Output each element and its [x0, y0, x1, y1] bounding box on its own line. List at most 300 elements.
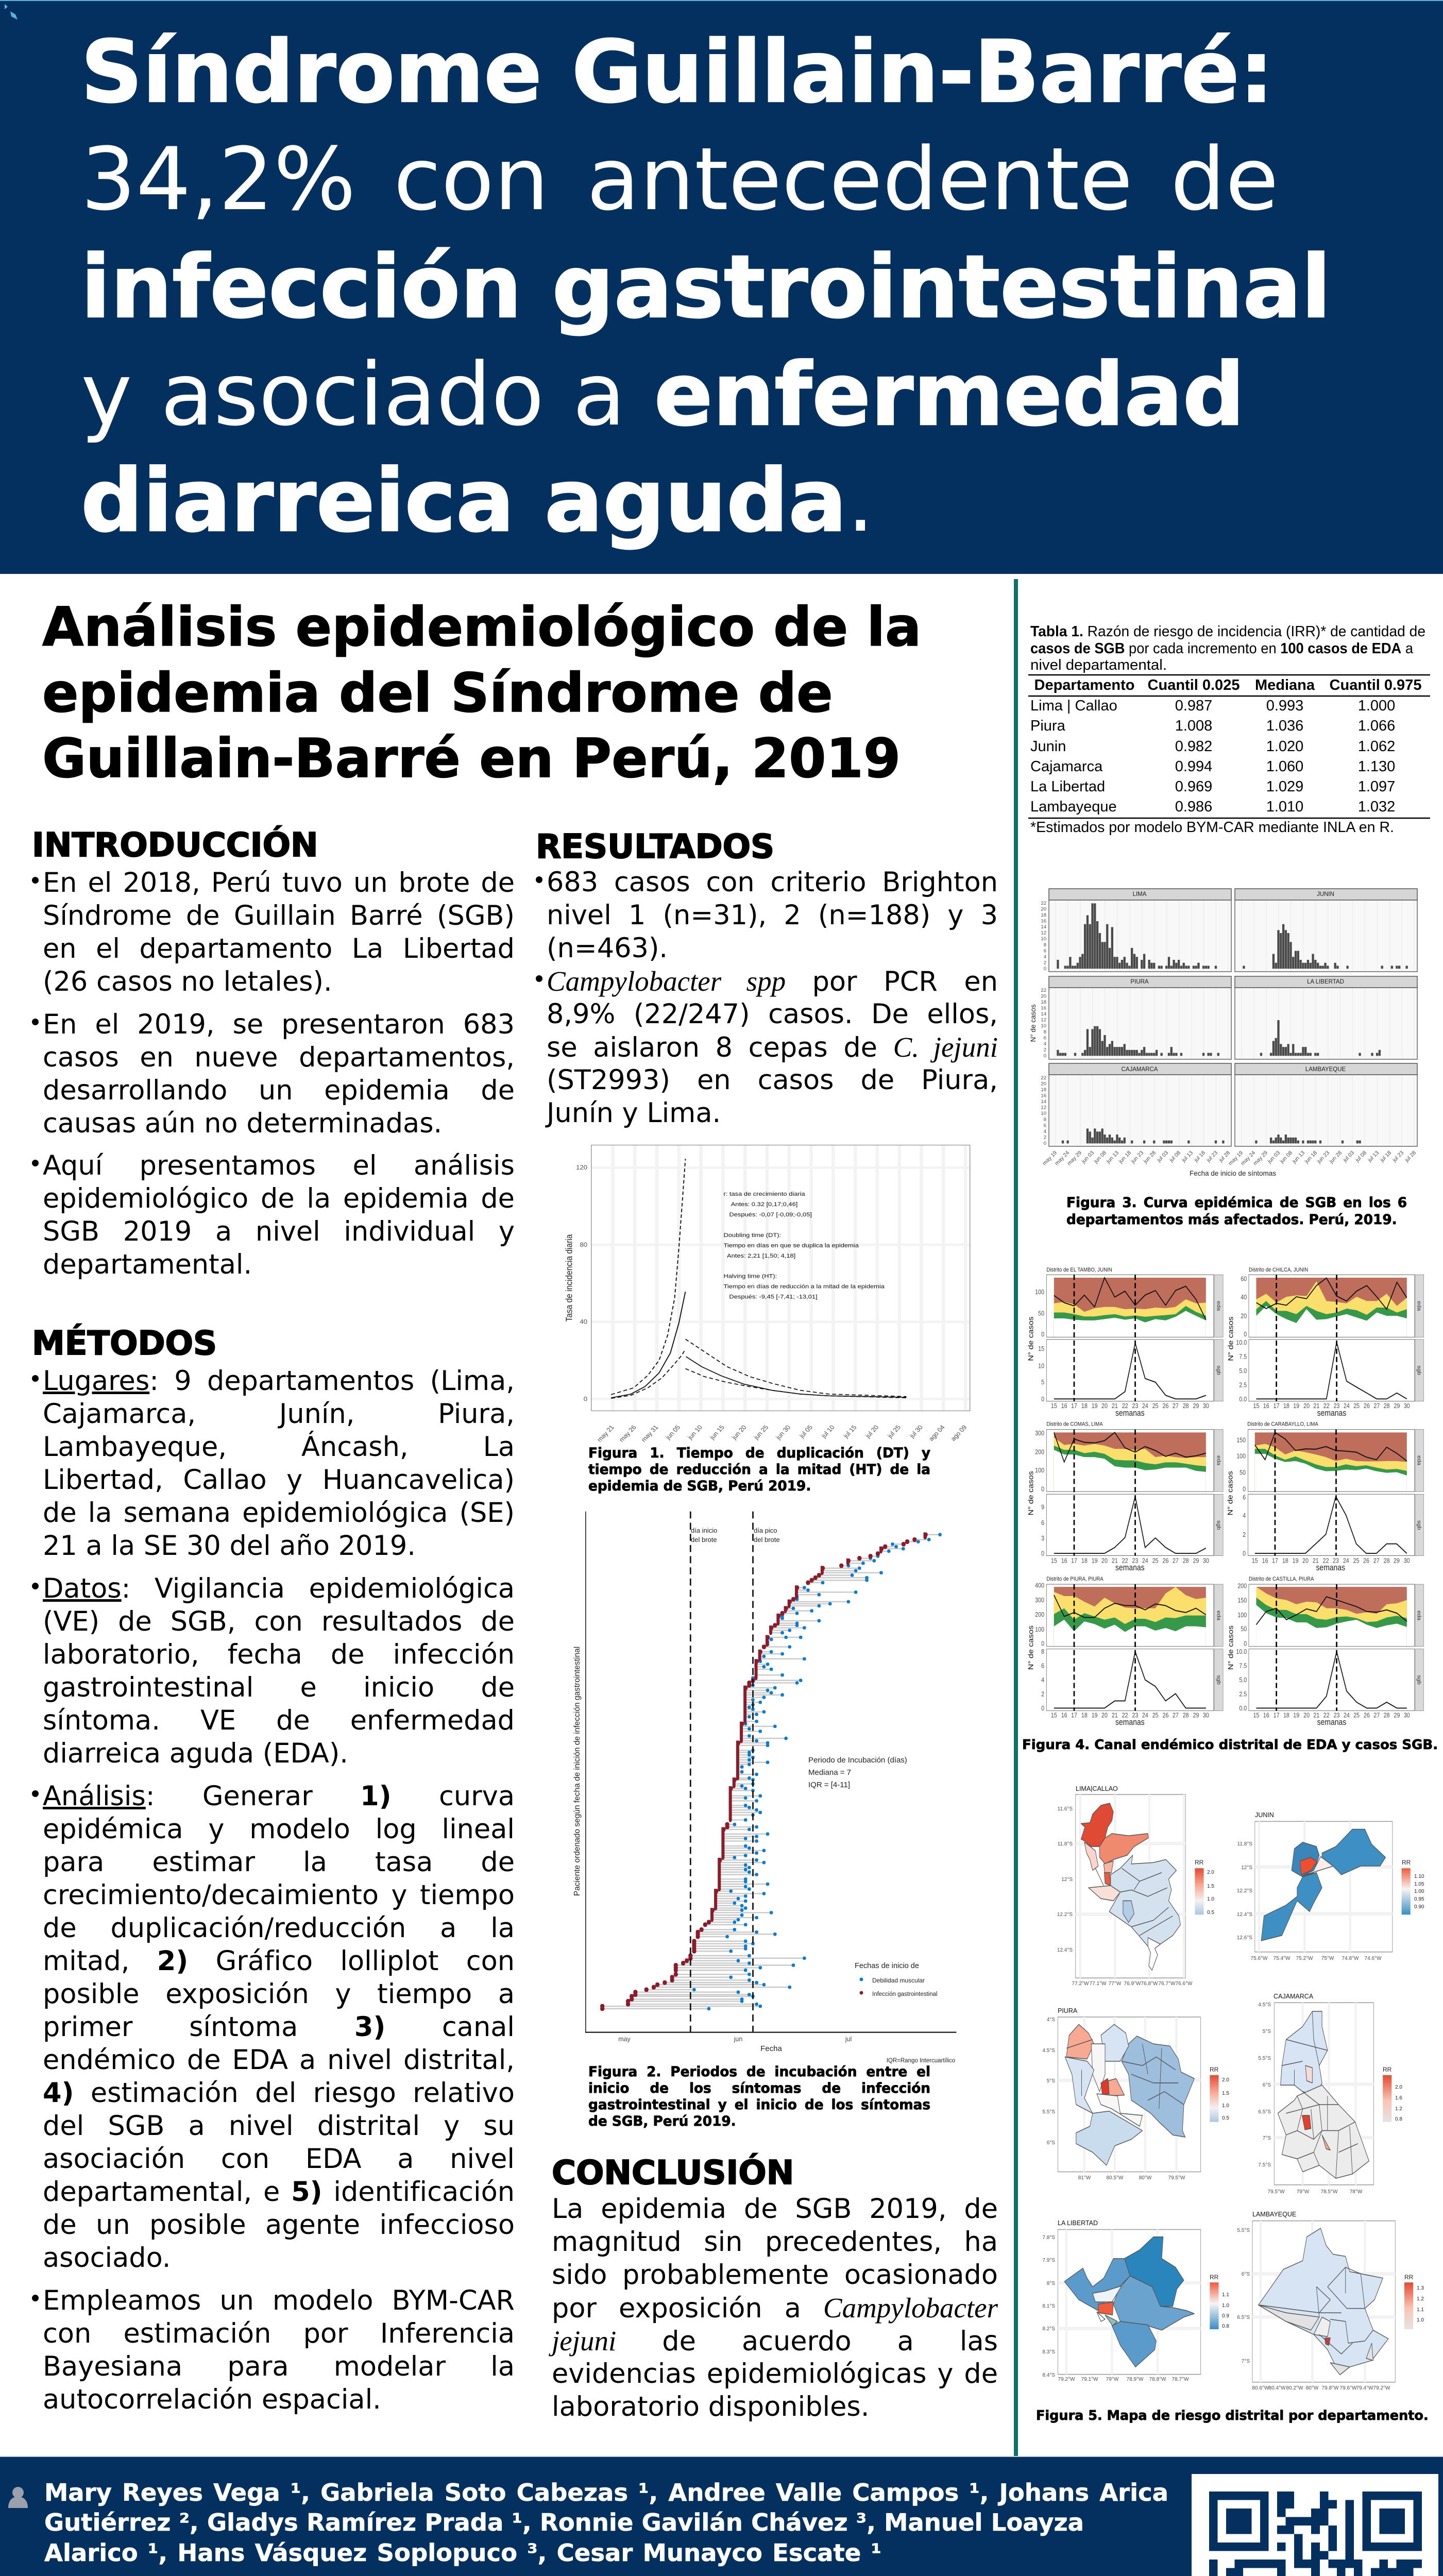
y axis ticks: 6	[1044, 1123, 1046, 1128]
panel piura: sgb	[1216, 1675, 1221, 1685]
panel chilca: 2.5	[1239, 1382, 1247, 1389]
headline line 4: y asociado a enfermedad	[81, 344, 1245, 445]
x ticks: jun 10	[686, 1424, 704, 1441]
map axis labels: 5.5°S	[1258, 2056, 1271, 2061]
date ticks right: jun 28	[1328, 1150, 1343, 1165]
panel comas: 0	[1041, 1550, 1044, 1557]
map axis labels: 6°S	[1242, 2272, 1250, 2277]
panel castilla: eda	[1416, 1611, 1422, 1620]
map legends text: 0.8	[1222, 2324, 1229, 2329]
panel castilla: 26	[1364, 1712, 1370, 1719]
heading: introducción: INTRODUCCIÓN	[32, 826, 318, 865]
panel carabayllo: 0	[1243, 1550, 1246, 1557]
y axis ticks: 6	[1044, 1035, 1046, 1041]
methods bullet: análisis: departamental, e 5) identificación	[43, 2176, 515, 2208]
map axis labels: 8.1°S	[1042, 2303, 1055, 2309]
map junin	[1255, 1821, 1393, 1952]
outbreak annotations: día pico	[754, 1527, 777, 1534]
panel el tambo: 28	[1183, 1402, 1189, 1410]
annotation text: Después: -0,07 [-0,09;-0,05]	[729, 1211, 812, 1218]
incubation stats	[808, 1756, 907, 1789]
strip labels: CAJAMARCA	[1122, 1066, 1158, 1073]
date ticks left: may 24	[1054, 1150, 1071, 1166]
panel comas: sgb	[1216, 1520, 1221, 1530]
x ticks: may 31	[640, 1424, 660, 1443]
annotation text: Antes: 2,21 [1,50; 4,18]	[727, 1252, 795, 1259]
y axis ticks: 4	[1044, 954, 1046, 960]
intro bullet 3: Aquí presentamos el análisis	[43, 1150, 515, 1181]
results bullet 2: Junín y Lima.	[547, 1097, 721, 1129]
methods bullet: modelo: Empleamos un modelo BYM-CAR	[43, 2285, 515, 2316]
panel carabayllo: 21	[1313, 1557, 1319, 1565]
map legends text: 2.0	[1207, 1870, 1214, 1875]
conclusion text: laboratorio disponibles.	[552, 2391, 869, 2422]
axis labels: may	[618, 2036, 631, 2043]
panel el tambo: 10	[1038, 1363, 1044, 1370]
panel castilla: 16	[1263, 1712, 1269, 1719]
annotation text: Doubling time (DT):	[723, 1232, 781, 1239]
map la libertad	[1058, 2229, 1201, 2375]
date ticks right: jul 08	[1354, 1150, 1368, 1164]
map legends text: RR	[1383, 2066, 1392, 2073]
x ticks: jun 25	[752, 1424, 770, 1441]
panel castilla: 20	[1303, 1712, 1310, 1719]
panel carabayllo: 28	[1384, 1557, 1390, 1565]
map axis labels: 78°W	[1350, 2189, 1363, 2195]
y axis ticks: 20	[1041, 907, 1046, 912]
results bullet 2: Campylobacter spp por PCR en	[547, 965, 998, 997]
incubation stats: IQR = [4-11]	[808, 1781, 850, 1789]
panel el tambo: 25	[1152, 1402, 1159, 1410]
y axis ticks: 16	[1041, 1093, 1046, 1099]
date ticks right: jun 23	[1316, 1150, 1331, 1165]
methods bullet: datos: Datos: Vigilancia epidemiológica	[43, 1573, 515, 1604]
map legends text: 2.0	[1222, 2077, 1229, 2083]
axis labels	[618, 2036, 955, 2064]
divider column rule	[1014, 579, 1018, 2456]
panel castilla: 23	[1334, 1712, 1340, 1719]
date ticks right: jul 18	[1379, 1150, 1393, 1164]
methods bullet: datos: síntoma. VE de enfermedad	[43, 1705, 515, 1736]
table rows: 1.062	[1358, 738, 1395, 755]
methods bullet: análisis: del SGB a nivel distrital y su	[43, 2110, 515, 2142]
panel comas: N° de casos	[1028, 1471, 1035, 1515]
map legends text: 1.2	[1395, 2106, 1402, 2112]
map legends text: 1.6	[1395, 2095, 1402, 2101]
map axis labels: 79.8°W	[1322, 2385, 1339, 2391]
map axis labels: 79.2°W	[1373, 2385, 1390, 2391]
panel carabayllo: 22	[1323, 1557, 1329, 1565]
map axis labels: 78.9°W	[1127, 2377, 1144, 2382]
intro bullet 2: desarrollando un epidemia de	[43, 1075, 515, 1106]
panel piura: 4	[1041, 1676, 1044, 1684]
methods bullet: datos	[43, 1572, 515, 1770]
panel comas: 6	[1041, 1519, 1044, 1527]
caption figure 1: epidemia de SGB, Perú 2019.	[588, 1479, 811, 1494]
panel castilla: 2.5	[1239, 1691, 1247, 1698]
methods bullet: lugares: de la semana epidemiológica (SE)	[43, 1497, 515, 1529]
panel chilca: eda	[1416, 1301, 1422, 1311]
panel piura: N° de casos	[1028, 1625, 1035, 1670]
bars lambayeque	[1255, 1134, 1361, 1143]
map legends text: RR	[1210, 2274, 1219, 2281]
panel carabayllo: 100	[1236, 1453, 1246, 1460]
panel carabayllo: 17	[1272, 1557, 1278, 1565]
table rows: Lambayeque	[1030, 799, 1117, 815]
panel castilla: semanas	[1317, 1718, 1346, 1727]
map axis labels: 12.2°S	[1237, 1888, 1252, 1894]
panel el tambo: 29	[1193, 1402, 1199, 1410]
annotation text: r: tasa de crecimiento diaria	[723, 1191, 805, 1197]
table rows: 1.000	[1358, 698, 1395, 714]
methods bullet: lugares: Lambayeque, Áncash, La	[43, 1431, 515, 1463]
figure 2: incubation lollipop	[573, 1512, 956, 2064]
map axis labels: 79.5°W	[1268, 2189, 1285, 2195]
heading: conclusión: CONCLUSIÓN	[552, 2154, 794, 2192]
map legends text: RR	[1402, 1859, 1411, 1866]
map axis labels: 79.2°W	[1058, 2377, 1075, 2382]
results bullet 1: nivel 1 (n=31), 2 (n=188) y 3	[547, 900, 998, 931]
map legends text: 1.10	[1414, 1874, 1424, 1879]
panel chilca: 0	[1244, 1331, 1247, 1338]
panel carabayllo: 15	[1252, 1557, 1258, 1565]
panel comas: 0	[1041, 1486, 1044, 1493]
y axis ticks: 18	[1041, 999, 1046, 1005]
panel castilla: 0	[1244, 1640, 1247, 1648]
panel castilla: 7.5	[1239, 1663, 1247, 1670]
map legends text: 0.5	[1207, 1910, 1214, 1916]
map axis labels: 79.4°W	[1356, 2385, 1373, 2391]
x ticks: jun 15	[708, 1424, 726, 1441]
intro bullet 2: En el 2019, se presentaron 683	[43, 1009, 515, 1040]
legend bars	[1195, 1868, 1413, 2329]
date ticks left: jul 08	[1168, 1150, 1182, 1164]
panel piura: 15	[1051, 1712, 1057, 1719]
panel piura: eda	[1216, 1611, 1221, 1620]
map titles: PIURA	[1058, 2007, 1078, 2014]
map axis labels: 5.5°S	[1042, 2109, 1055, 2115]
x ticks: jun 30	[774, 1424, 792, 1441]
panel piura: 21	[1112, 1712, 1118, 1719]
panel piura: 30	[1203, 1712, 1209, 1719]
map axis labels: 7°S	[1242, 2359, 1250, 2364]
panel piura: 24	[1142, 1712, 1148, 1719]
map legends text: RR	[1195, 1859, 1204, 1866]
panel piura: 2	[1041, 1691, 1044, 1698]
date ticks left: may 19	[1041, 1150, 1058, 1166]
panel castilla: 21	[1313, 1712, 1319, 1719]
panel castilla	[1227, 1575, 1424, 1727]
intro bullet 3: departamental.	[43, 1249, 252, 1280]
panel chilca: 7.5	[1239, 1353, 1247, 1361]
legend: Infección gastrointestinal	[872, 1991, 938, 1997]
conclusion text: magnitud sin precedentes, ha	[552, 2226, 998, 2258]
panel castilla: 200	[1237, 1583, 1247, 1590]
y axis ticks: 10	[1041, 1023, 1046, 1029]
panel piura: 200	[1035, 1611, 1044, 1618]
panel carabayllo: 20	[1302, 1557, 1309, 1565]
map legends text: RR	[1210, 2066, 1219, 2073]
table rows: 0.982	[1175, 738, 1212, 755]
panel piura: 0	[1041, 1640, 1044, 1648]
panel piura: 18	[1081, 1712, 1088, 1719]
panel comas: 21	[1112, 1557, 1118, 1565]
panel castilla: 30	[1404, 1712, 1410, 1719]
table rows: 0.993	[1266, 698, 1303, 714]
map axis labels: 76.7°W	[1159, 1981, 1176, 1987]
figure 1: doubling and halving time	[564, 1145, 970, 1443]
panel el tambo: 30	[1203, 1402, 1209, 1410]
map axis labels: 4.5°S	[1042, 2048, 1055, 2054]
date ticks left: jun 03	[1080, 1150, 1095, 1165]
y axis ticks: 12	[1041, 1018, 1046, 1023]
panel el tambo: 24	[1142, 1402, 1148, 1410]
panel chilca: 40	[1241, 1294, 1247, 1301]
table rows: 0.969	[1175, 778, 1212, 795]
x ticks: ago 09	[949, 1424, 969, 1442]
table header row: Cuantil 0.025	[1148, 677, 1240, 693]
table title: Tabla 1. Razón de riesgo de incidencia (IRR)* de cantidad de	[1030, 623, 1425, 640]
annotation text: Tiempo en días de reducción a la mitad de la epidemia	[723, 1283, 885, 1290]
conclusion text: La epidemia de SGB 2019, de	[552, 2193, 998, 2225]
map legends text: 1.1	[1417, 2307, 1424, 2313]
y axis ticks: 8	[1044, 1117, 1046, 1123]
results bullet 1: 683 casos con criterio Brighton	[547, 867, 998, 898]
methods bullet: lugares: 21 a la SE 30 del año 2019.	[43, 1530, 416, 1562]
map axis labels	[1042, 1806, 1390, 2391]
panel piura: semanas	[1115, 1718, 1145, 1727]
panel piura: 26	[1163, 1712, 1169, 1719]
panel el tambo: 0	[1041, 1331, 1044, 1338]
panel piura: 300	[1035, 1597, 1044, 1604]
intro bullet 3	[43, 1149, 515, 1281]
panel carabayllo: 50	[1240, 1469, 1246, 1477]
intro bullet 1: (26 casos no letales).	[43, 966, 332, 997]
map axis labels: 8.3°S	[1042, 2349, 1055, 2355]
y axis ticks: 10	[1041, 936, 1046, 942]
panel chilca: 5.0	[1239, 1367, 1247, 1375]
intro bullet 2	[43, 1008, 515, 1140]
panel comas: 9	[1041, 1504, 1044, 1511]
map axis labels: 11.8°S	[1237, 1841, 1252, 1847]
panel castilla: 5.0	[1239, 1676, 1247, 1684]
table rows	[1030, 698, 1395, 815]
y axis ticks: 0	[1044, 1053, 1046, 1059]
map piura	[1058, 2017, 1201, 2172]
x ticks: jun 05	[664, 1424, 682, 1441]
panel el tambo: 50	[1038, 1310, 1044, 1317]
bars junin	[1243, 924, 1408, 969]
y axis ticks: 18	[1041, 912, 1046, 918]
x ticks: jul 30	[908, 1424, 924, 1439]
plot grid	[591, 1167, 970, 1399]
map axis labels: 79.1°W	[1081, 2377, 1098, 2382]
table rows: La Libertad	[1030, 778, 1105, 795]
panel comas: 19	[1092, 1557, 1098, 1565]
map lambayeque	[1252, 2221, 1395, 2382]
methods bullet: datos: gastrointestinal e inicio de	[43, 1672, 515, 1703]
map axis labels: 6°S	[1263, 2082, 1271, 2088]
date ticks left: jun 18	[1117, 1150, 1132, 1165]
map axis labels: 75°W	[1321, 1956, 1334, 1961]
panel el tambo: 0	[1041, 1396, 1044, 1403]
panel el tambo: 19	[1092, 1402, 1098, 1410]
panel el tambo: 17	[1071, 1402, 1077, 1410]
y axis ticks: 20	[1041, 1081, 1046, 1087]
panel chilca: 26	[1364, 1402, 1370, 1410]
outbreak annotations: del brote	[691, 1536, 717, 1544]
panel carabayllo: 27	[1373, 1557, 1380, 1565]
table rows: 1.032	[1358, 799, 1395, 815]
panel piura: 23	[1132, 1712, 1139, 1719]
results bullet 1: (n=463).	[547, 933, 668, 964]
date ticks left: jul 13	[1180, 1150, 1194, 1164]
caption figure 2: gastrointestinal y el inicio de los síntomas	[588, 2097, 930, 2113]
methods bullet: lugares: Libertad, Callao y Huancavelica)	[43, 1464, 515, 1496]
map axis labels: 80.6°W	[1252, 2385, 1269, 2391]
panel comas: 18	[1081, 1557, 1088, 1565]
caption figure 2: de SGB, Perú 2019.	[588, 2114, 736, 2129]
methods bullet: datos: laboratorio, fecha de infección	[43, 1639, 515, 1670]
caption figure 3	[1066, 1195, 1407, 1229]
methods bullet: análisis: crecimiento/decaimiento y tiempo	[43, 1879, 515, 1911]
date ticks right: may 19	[1227, 1150, 1244, 1166]
date ticks left: jul 18	[1193, 1150, 1207, 1164]
panel el tambo: 20	[1101, 1402, 1108, 1410]
panel piura: 100	[1035, 1626, 1044, 1633]
map legends text: 1.3	[1417, 2285, 1424, 2291]
table rows: 1.097	[1358, 778, 1395, 795]
map axis labels: 79°W	[1297, 2189, 1310, 2195]
map axis labels: 78.8°W	[1149, 2377, 1166, 2382]
panel comas: Distrito de COMAS, LIMA	[1046, 1421, 1104, 1428]
strips	[1049, 889, 1417, 1075]
panel carabayllo	[1227, 1421, 1424, 1573]
date ticks right: jul 13	[1366, 1150, 1380, 1164]
methods bullet: análisis: endémico de EDA a nivel distrital,	[43, 2044, 515, 2076]
table rows: Cajamarca	[1030, 758, 1103, 775]
map axis labels: 74.6°W	[1365, 1956, 1382, 1961]
panel carabayllo: 0	[1243, 1486, 1246, 1493]
caption figure 3: departamentos más afectados. Perú, 2019.	[1066, 1212, 1397, 1228]
table header row	[1034, 677, 1421, 693]
caption figure 3: Figura 3. Curva epidémica de SGB en los 6	[1066, 1195, 1407, 1211]
headline line 5: diarreica aguda.	[81, 450, 874, 551]
strip labels: LAMBAYEQUE	[1305, 1066, 1346, 1073]
y axis ticks: 4	[1044, 1129, 1046, 1134]
panel castilla: 22	[1323, 1712, 1330, 1719]
map axis labels: 80°W	[1306, 2385, 1319, 2391]
date ticks left: jul 03	[1156, 1150, 1169, 1164]
map lima callao	[1076, 1794, 1185, 1978]
axis titles: N° de casos	[1029, 1004, 1037, 1042]
icon: person	[8, 2487, 28, 2508]
panel el tambo: 15	[1051, 1402, 1057, 1410]
methods bullet: modelo: autocorrelación espacial.	[43, 2384, 381, 2415]
y axis ticks: 2	[1044, 1134, 1046, 1140]
panel comas: 30	[1203, 1557, 1209, 1565]
axis labels: jul	[845, 2036, 852, 2043]
x ticks: jul 05	[797, 1424, 814, 1439]
strip labels: LA LIBERTAD	[1307, 979, 1344, 985]
panel carabayllo: semanas	[1316, 1563, 1345, 1573]
date ticks left: jun 28	[1142, 1150, 1157, 1165]
panel el tambo: 18	[1081, 1402, 1088, 1410]
panel el tambo: eda	[1216, 1301, 1221, 1311]
incubation stats: Periodo de Incubación (días)	[808, 1756, 907, 1765]
table rows: 1.036	[1266, 718, 1303, 734]
top left artefact	[5, 4, 18, 20]
panel el tambo: semanas	[1115, 1409, 1145, 1418]
table rows: 1.008	[1175, 718, 1212, 734]
map axis labels: 6.5°S	[1237, 2315, 1250, 2320]
caption figure 1	[588, 1445, 930, 1495]
y axis ticks: 2	[1044, 1047, 1046, 1053]
map axis labels: 4.5°S	[1258, 2002, 1271, 2008]
panel el tambo: 5	[1041, 1379, 1044, 1386]
panel comas: 27	[1173, 1557, 1179, 1565]
figure 3: epidemic curves	[1029, 889, 1417, 1177]
methods bullet: modelo	[43, 2284, 515, 2416]
table header row: Departamento	[1034, 677, 1134, 693]
panel grid	[1055, 936, 1417, 1111]
intro bullet 2: casos en nueve departamentos,	[43, 1042, 515, 1073]
y axis ticks: 2	[1044, 960, 1046, 965]
bars piura	[1057, 1026, 1219, 1056]
axis titles	[1029, 1004, 1276, 1177]
table rules	[1028, 675, 1430, 818]
y ticks: 0	[584, 1396, 587, 1402]
methods bullet: lugares: Lugares: 9 departamentos (Lima,	[43, 1365, 515, 1397]
panel chilca: 17	[1274, 1402, 1280, 1410]
table rows: Junin	[1030, 738, 1066, 755]
panel chilca: 22	[1323, 1402, 1330, 1410]
methods bullet: datos: (VE) de SGB, con resultados de	[43, 1606, 515, 1637]
map legends text: RR	[1404, 2274, 1414, 2281]
panel comas	[1028, 1421, 1223, 1573]
panel el tambo: 23	[1132, 1402, 1139, 1410]
y axis ticks: 16	[1041, 1006, 1046, 1011]
map legends text: 1.5	[1207, 1884, 1214, 1889]
strip labels: JUNIN	[1317, 891, 1334, 897]
axis labels: Fecha	[760, 2044, 782, 2053]
map axis labels: 77.1°W	[1090, 1981, 1107, 1987]
table 1	[1028, 623, 1430, 836]
map axis labels: 76.9°W	[1124, 1981, 1141, 1987]
intro bullet 3: SGB 2019 a nivel individual y	[43, 1216, 515, 1247]
poster subtitle: Análisis epidemiológico de la	[42, 596, 921, 658]
date ticks right: jul 23	[1391, 1150, 1405, 1164]
map legends text: 1.0	[1222, 2103, 1229, 2109]
panel comas: 20	[1101, 1557, 1108, 1565]
panel comas: 26	[1163, 1557, 1169, 1565]
map axis labels: 12.6°S	[1237, 1935, 1252, 1941]
panel piura: 16	[1061, 1712, 1067, 1719]
panel chilca: semanas	[1317, 1409, 1346, 1418]
panel carabayllo: 16	[1262, 1557, 1268, 1565]
map axis labels: 80.2°W	[1286, 2385, 1303, 2391]
panel castilla: 28	[1384, 1712, 1390, 1719]
table rows: 1.029	[1266, 778, 1303, 795]
date ticks right: jul 03	[1342, 1150, 1355, 1164]
map legends text: 1.05	[1414, 1882, 1424, 1887]
date ticks left: jun 08	[1093, 1150, 1108, 1165]
y axis ticks: 14	[1041, 924, 1046, 930]
x ticks: ago 04	[927, 1424, 946, 1442]
strip labels: PIURA	[1130, 979, 1149, 985]
date ticks left: jun 13	[1105, 1150, 1120, 1165]
y axis ticks: 0	[1044, 966, 1046, 972]
